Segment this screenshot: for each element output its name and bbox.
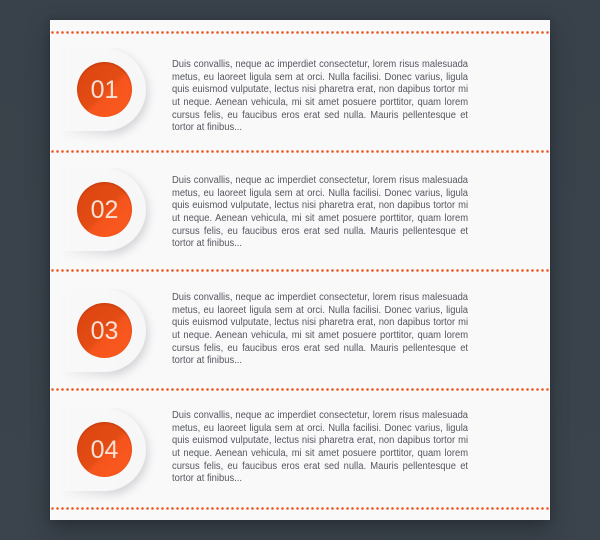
number badge 04 (77, 422, 132, 477)
text block: step 01: ut neque. Aenean vehicula, mi sit amet posuere porttitor, quam lorem (172, 97, 468, 108)
divider: dotted line 3 (50, 269, 550, 272)
text block: step 01: metus, eu laoreet ligula sem at orci. Nulla facilisi. Donec varius, ligula (172, 72, 468, 83)
tab: step 01 (74, 50, 152, 138)
number badge 01: 01 (91, 76, 118, 104)
divider: dotted line 4 (50, 388, 550, 391)
text block: step 03 (172, 292, 468, 366)
text block: step 02: quis euismod vulputate, lectus nisi pharetra erat, non dapibus tortor mi (172, 200, 468, 211)
text block: step 04: quis euismod vulputate, lectus nisi pharetra erat, non dapibus tortor mi (172, 435, 468, 446)
text block: step 04 (172, 410, 468, 484)
number badge 04: 04 (91, 436, 118, 464)
text block: step 03: ut neque. Aenean vehicula, mi sit amet posuere porttitor, quam lorem (172, 330, 468, 341)
text block: step 03: quis euismod vulputate, lectus nisi pharetra erat, non dapibus tortor mi (172, 317, 468, 328)
panel: white card (50, 20, 550, 520)
text block: step 01: Duis convallis, neque ac imperdiet consectetur, lorem risus malesuada (172, 59, 468, 70)
number badge 02 (77, 182, 132, 237)
number badge 03 (77, 303, 132, 358)
number badge 03: 03 (91, 317, 118, 345)
tab: step 04 (74, 410, 152, 498)
text block: step 04: cursus felis, eu faucibus eros erat sed nulla. Mauris pellentesque et (172, 461, 468, 472)
text block: step 02: Duis convallis, neque ac imperdiet consectetur, lorem risus malesuada (172, 175, 468, 186)
tab: step 03 (74, 292, 152, 379)
text block: step 03: tortor at finibus... (172, 355, 242, 366)
tab: step 02 (74, 170, 152, 258)
text block: step 02: cursus felis, eu faucibus eros erat sed nulla. Mauris pellentesque et (172, 226, 468, 237)
text block: step 01 (172, 59, 468, 133)
text block: step 02 (172, 175, 468, 249)
divider: dotted line 2 (50, 150, 550, 153)
number badge 02: 02 (91, 196, 118, 224)
divider: dotted line 1 (50, 31, 550, 34)
text block: step 01: quis euismod vulputate, lectus nisi pharetra erat, non dapibus tortor mi (172, 84, 468, 95)
divider: dotted line 5 (50, 507, 550, 510)
text block: step 02: metus, eu laoreet ligula sem at orci. Nulla facilisi. Donec varius, ligula (172, 188, 468, 199)
text block: step 04: ut neque. Aenean vehicula, mi sit amet posuere porttitor, quam lorem (172, 448, 468, 459)
number badge 01 (77, 62, 132, 117)
text block: step 01: tortor at finibus... (172, 122, 242, 133)
text block: step 03: metus, eu laoreet ligula sem at orci. Nulla facilisi. Donec varius, ligula (172, 305, 468, 316)
text block: step 04: metus, eu laoreet ligula sem at orci. Nulla facilisi. Donec varius, ligula (172, 423, 468, 434)
text block: step 03: Duis convallis, neque ac imperdiet consectetur, lorem risus malesuada (172, 292, 468, 303)
text block: step 03: cursus felis, eu faucibus eros erat sed nulla. Mauris pellentesque et (172, 343, 468, 354)
text block: step 02: tortor at finibus... (172, 238, 242, 249)
text block: step 01: cursus felis, eu faucibus eros erat sed nulla. Mauris pellentesque et (172, 110, 468, 121)
text block: step 02: ut neque. Aenean vehicula, mi sit amet posuere porttitor, quam lorem (172, 213, 468, 224)
text block: step 04: tortor at finibus... (172, 473, 242, 484)
text block: step 04: Duis convallis, neque ac imperdiet consectetur, lorem risus malesuada (172, 410, 468, 421)
